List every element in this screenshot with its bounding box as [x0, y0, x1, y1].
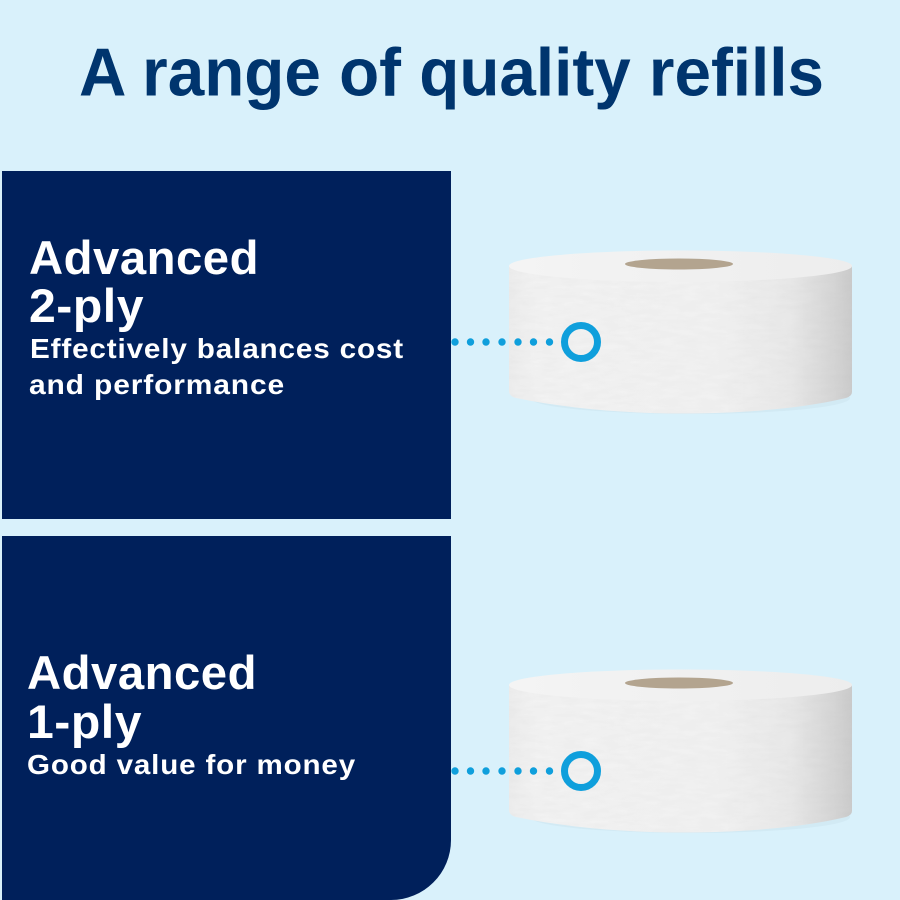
heading: Advanced 2-ply: 2-ply	[29, 279, 144, 332]
heading: Advanced 2-ply: Advanced	[29, 231, 259, 284]
panel: Advanced 1-ply	[2, 536, 451, 900]
icon: toilet roll 2-ply	[509, 250, 852, 414]
callout: dotted connector 2-ply	[451, 326, 598, 358]
callout: dotted connector 1-ply	[451, 754, 598, 788]
heading: Advanced 1-ply: 1-ply	[27, 695, 142, 748]
heading: Advanced 2-ply	[29, 231, 259, 332]
text block: 2-ply description: and performance	[29, 369, 285, 400]
heading: Advanced 1-ply: Advanced	[27, 646, 257, 699]
icon: toilet roll 1-ply	[509, 670, 852, 833]
panel: Advanced 2-ply	[2, 171, 451, 519]
text block: 2-ply description	[29, 333, 404, 400]
heading: Advanced 1-ply	[27, 646, 257, 748]
text block: 1-ply description: Good value for money	[27, 749, 356, 780]
text block: 2-ply description: Effectively balances cost	[30, 333, 404, 364]
title: A range of quality refills	[79, 34, 824, 110]
